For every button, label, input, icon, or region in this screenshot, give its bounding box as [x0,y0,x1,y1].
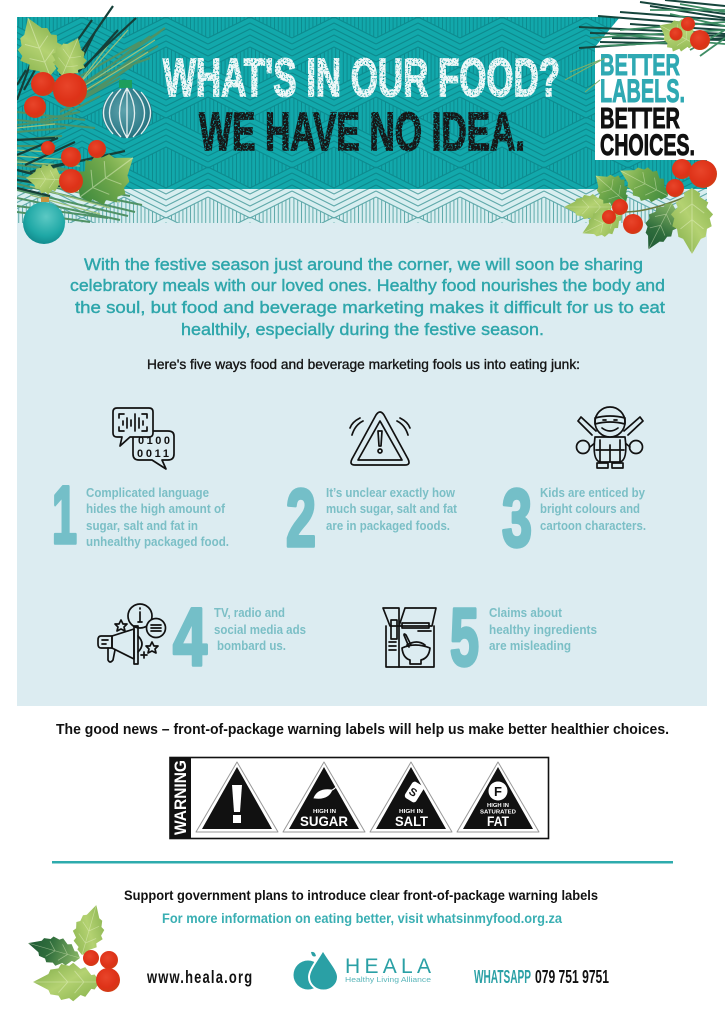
item 5 text: healthy ingredients [489,622,597,637]
icon: cereal box [383,608,436,667]
logo: HEALA [294,950,431,990]
intro text [70,255,665,339]
decoration: bottom holly [24,901,120,1001]
holly leaf [671,188,713,254]
warning triangle: sugar: SUGAR [300,813,348,829]
icon: teal bauble [23,197,65,244]
subheading: Here's five ways food and beverage marketing fools us into eating junk: [147,356,580,372]
holly leaf [52,38,87,76]
website: www.heala.org [146,968,252,988]
holly leaf [564,194,612,220]
intro text: celebratory meals with our loved ones. Healthy food nourishes the body and [70,276,665,295]
holly leaf [585,164,637,214]
warning triangle: salt: SALT [395,813,428,829]
more information link: For more information on eating better, visit whatsinmyfood.org.za [162,911,562,926]
item 4 text: bombard us. [217,638,286,653]
item 5 text: Claims about [489,605,563,620]
good news statement: The good news – front-of-package warning labels will help us make better healthier choices. [56,722,669,738]
item 3 text: cartoon characters. [540,518,646,533]
holly leaf [67,901,111,959]
whatsapp contact: WHATSAPP [474,967,531,987]
item 2 text: much sugar, salt and fat [326,501,458,516]
logo tagline: Healthy Living Alliance [345,975,431,984]
logo: better labels better choices: BETTER [600,103,680,135]
item 1 text: unhealthy packaged food. [86,534,229,549]
item 5 text [489,605,597,653]
warning triangle: exclamation [196,762,278,832]
item 2 text: It’s unclear exactly how [326,485,455,500]
call to action: Support government plans to introduce clear front-of-package warning labels [124,888,598,903]
warning triangle: saturated fat: HIGH IN [487,803,509,809]
item 4 text [214,605,306,653]
item 2 text [326,485,458,533]
item 3 text: Kids are enticed by [540,485,646,500]
number 2: 2 [286,473,316,564]
holly leaf [33,963,100,1001]
decoration: top-left pine and holly [7,6,165,222]
title line 2: WE HAVE NO IDEA. [199,102,525,162]
panel: light blue background [17,17,707,706]
item 5 [383,592,597,683]
holly leaf [652,10,703,59]
warning triangle: salt: S [406,786,419,800]
holly leaf [26,164,62,194]
warning triangle: saturated fat: FAT [487,813,509,829]
item 2 text: are in packaged foods. [326,518,450,533]
warning side label: WARNING [171,760,190,835]
warning triangle: salt: HIGH IN [399,809,423,815]
intro text: With the festive season just around the corner, we will soon be sharing [84,255,643,274]
holly leaf [635,196,686,256]
decoration: top-right pine and holly [565,0,725,92]
warning triangle: sugar [283,762,365,832]
header: teal patterned banner [17,17,707,189]
warning labels panel [170,757,548,839]
item 1 [52,408,229,561]
icon: megaphone [98,604,166,664]
number 4: 4 [173,592,207,683]
icon: speech bubbles with code [113,408,174,469]
icon: apple and drop [294,950,338,990]
item 1 text: sugar, salt and fat in [86,518,198,533]
holly leaf [576,201,628,246]
item 3 text [540,485,646,533]
logo wordmark: HEALA [345,955,431,978]
berries [602,159,717,234]
holly leaf [612,156,676,211]
icon: speech bubbles with code: 0011 [137,448,169,460]
warning triangle: saturated fat: F [494,784,502,799]
white corner behind logo [595,17,707,160]
item 1 text [86,485,229,549]
item 4 text: social media ads [214,622,306,637]
icon: striped bauble [102,80,152,138]
item 1 text: hides the high amount of [86,501,226,516]
berries [670,17,710,50]
berries [24,72,106,193]
title [163,48,560,162]
icon: cartoon turtle [576,407,643,468]
item 2 [286,412,458,564]
item 3 [502,407,646,564]
item 1 text: Complicated language [86,485,209,500]
warning triangle: saturated fat [457,762,539,832]
icon: warning triangle [350,412,410,465]
header: pale patterned strip [17,189,707,223]
decoration: holly below logo [564,156,717,256]
whatsapp contact: 079 751 9751 [535,967,609,987]
warning triangle: salt [370,762,452,832]
item 4 text: TV, radio and [214,605,285,620]
number 1: 1 [52,470,77,561]
berries [83,950,120,992]
warning triangle: sugar: HIGH IN [313,809,336,815]
warning triangle: saturated fat: SATURATED [480,810,516,816]
number 3: 3 [502,473,532,564]
holly leaf [78,154,134,205]
logo: better labels better choices [595,47,696,162]
item 5 text: are misleading [489,638,571,653]
icon: speech bubbles with code: 0100 [138,435,170,447]
item 3 text: bright colours and [540,501,640,516]
holly leaf [24,929,84,972]
logo: better labels better choices: BETTER [600,49,680,82]
intro text: healthily, especially during the festive season. [181,320,544,339]
intro text: the soul, but food and beverage marketing makes it difficult for us to eat [75,298,665,317]
holly leaf [18,18,62,75]
item 4 [98,592,306,683]
number 5: 5 [450,592,479,683]
